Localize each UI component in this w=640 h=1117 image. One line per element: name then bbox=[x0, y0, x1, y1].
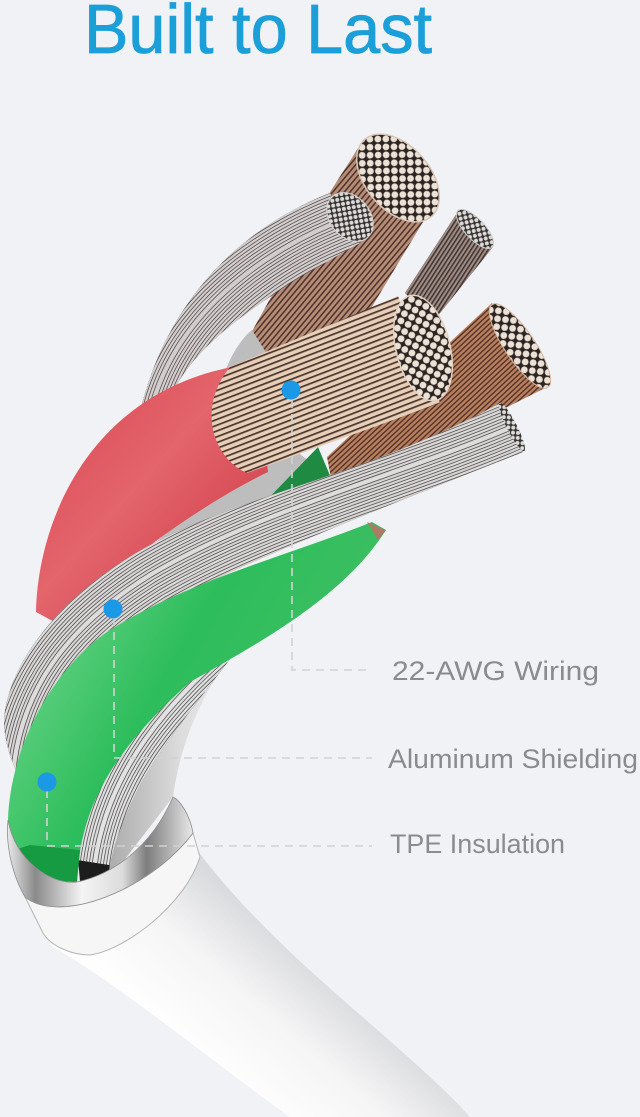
label: 22-AWG Wiring: 22-AWG Wiring bbox=[392, 656, 599, 686]
wire: thin silver bundle bbox=[150, 183, 383, 415]
marker: TPE Insulation dot bbox=[38, 772, 56, 792]
marker: 22-AWG Wiring dot bbox=[282, 380, 300, 400]
wire: dark brown bundle bbox=[405, 204, 499, 322]
wire: aluminum shielding band bbox=[12, 401, 529, 790]
white collar band bbox=[25, 833, 200, 955]
callout leader: Aluminum Shielding bbox=[114, 618, 372, 758]
wire: green TPE insulation bbox=[8, 522, 386, 882]
silver ring bbox=[7, 797, 193, 907]
inner white tube bbox=[105, 625, 255, 885]
label: TPE Insulation: TPE Insulation bbox=[390, 829, 565, 859]
lower silver strands bbox=[78, 659, 230, 881]
wire: large copper bundle bbox=[250, 119, 456, 365]
label: Aluminum Shielding: Aluminum Shielding bbox=[388, 744, 638, 774]
white cable body bbox=[50, 850, 470, 1117]
wire: right brown bundle bbox=[262, 296, 560, 510]
green insulation stub bbox=[262, 447, 331, 510]
callout leader: 22-AWG Wiring bbox=[292, 400, 372, 670]
inner grey shield bbox=[120, 330, 320, 585]
callout leader: TPE Insulation bbox=[47, 790, 372, 846]
red insulation bbox=[36, 367, 268, 625]
wire: front copper bundle, 22-AWG bbox=[212, 289, 462, 473]
marker: Aluminum Shielding dot bbox=[104, 600, 122, 618]
